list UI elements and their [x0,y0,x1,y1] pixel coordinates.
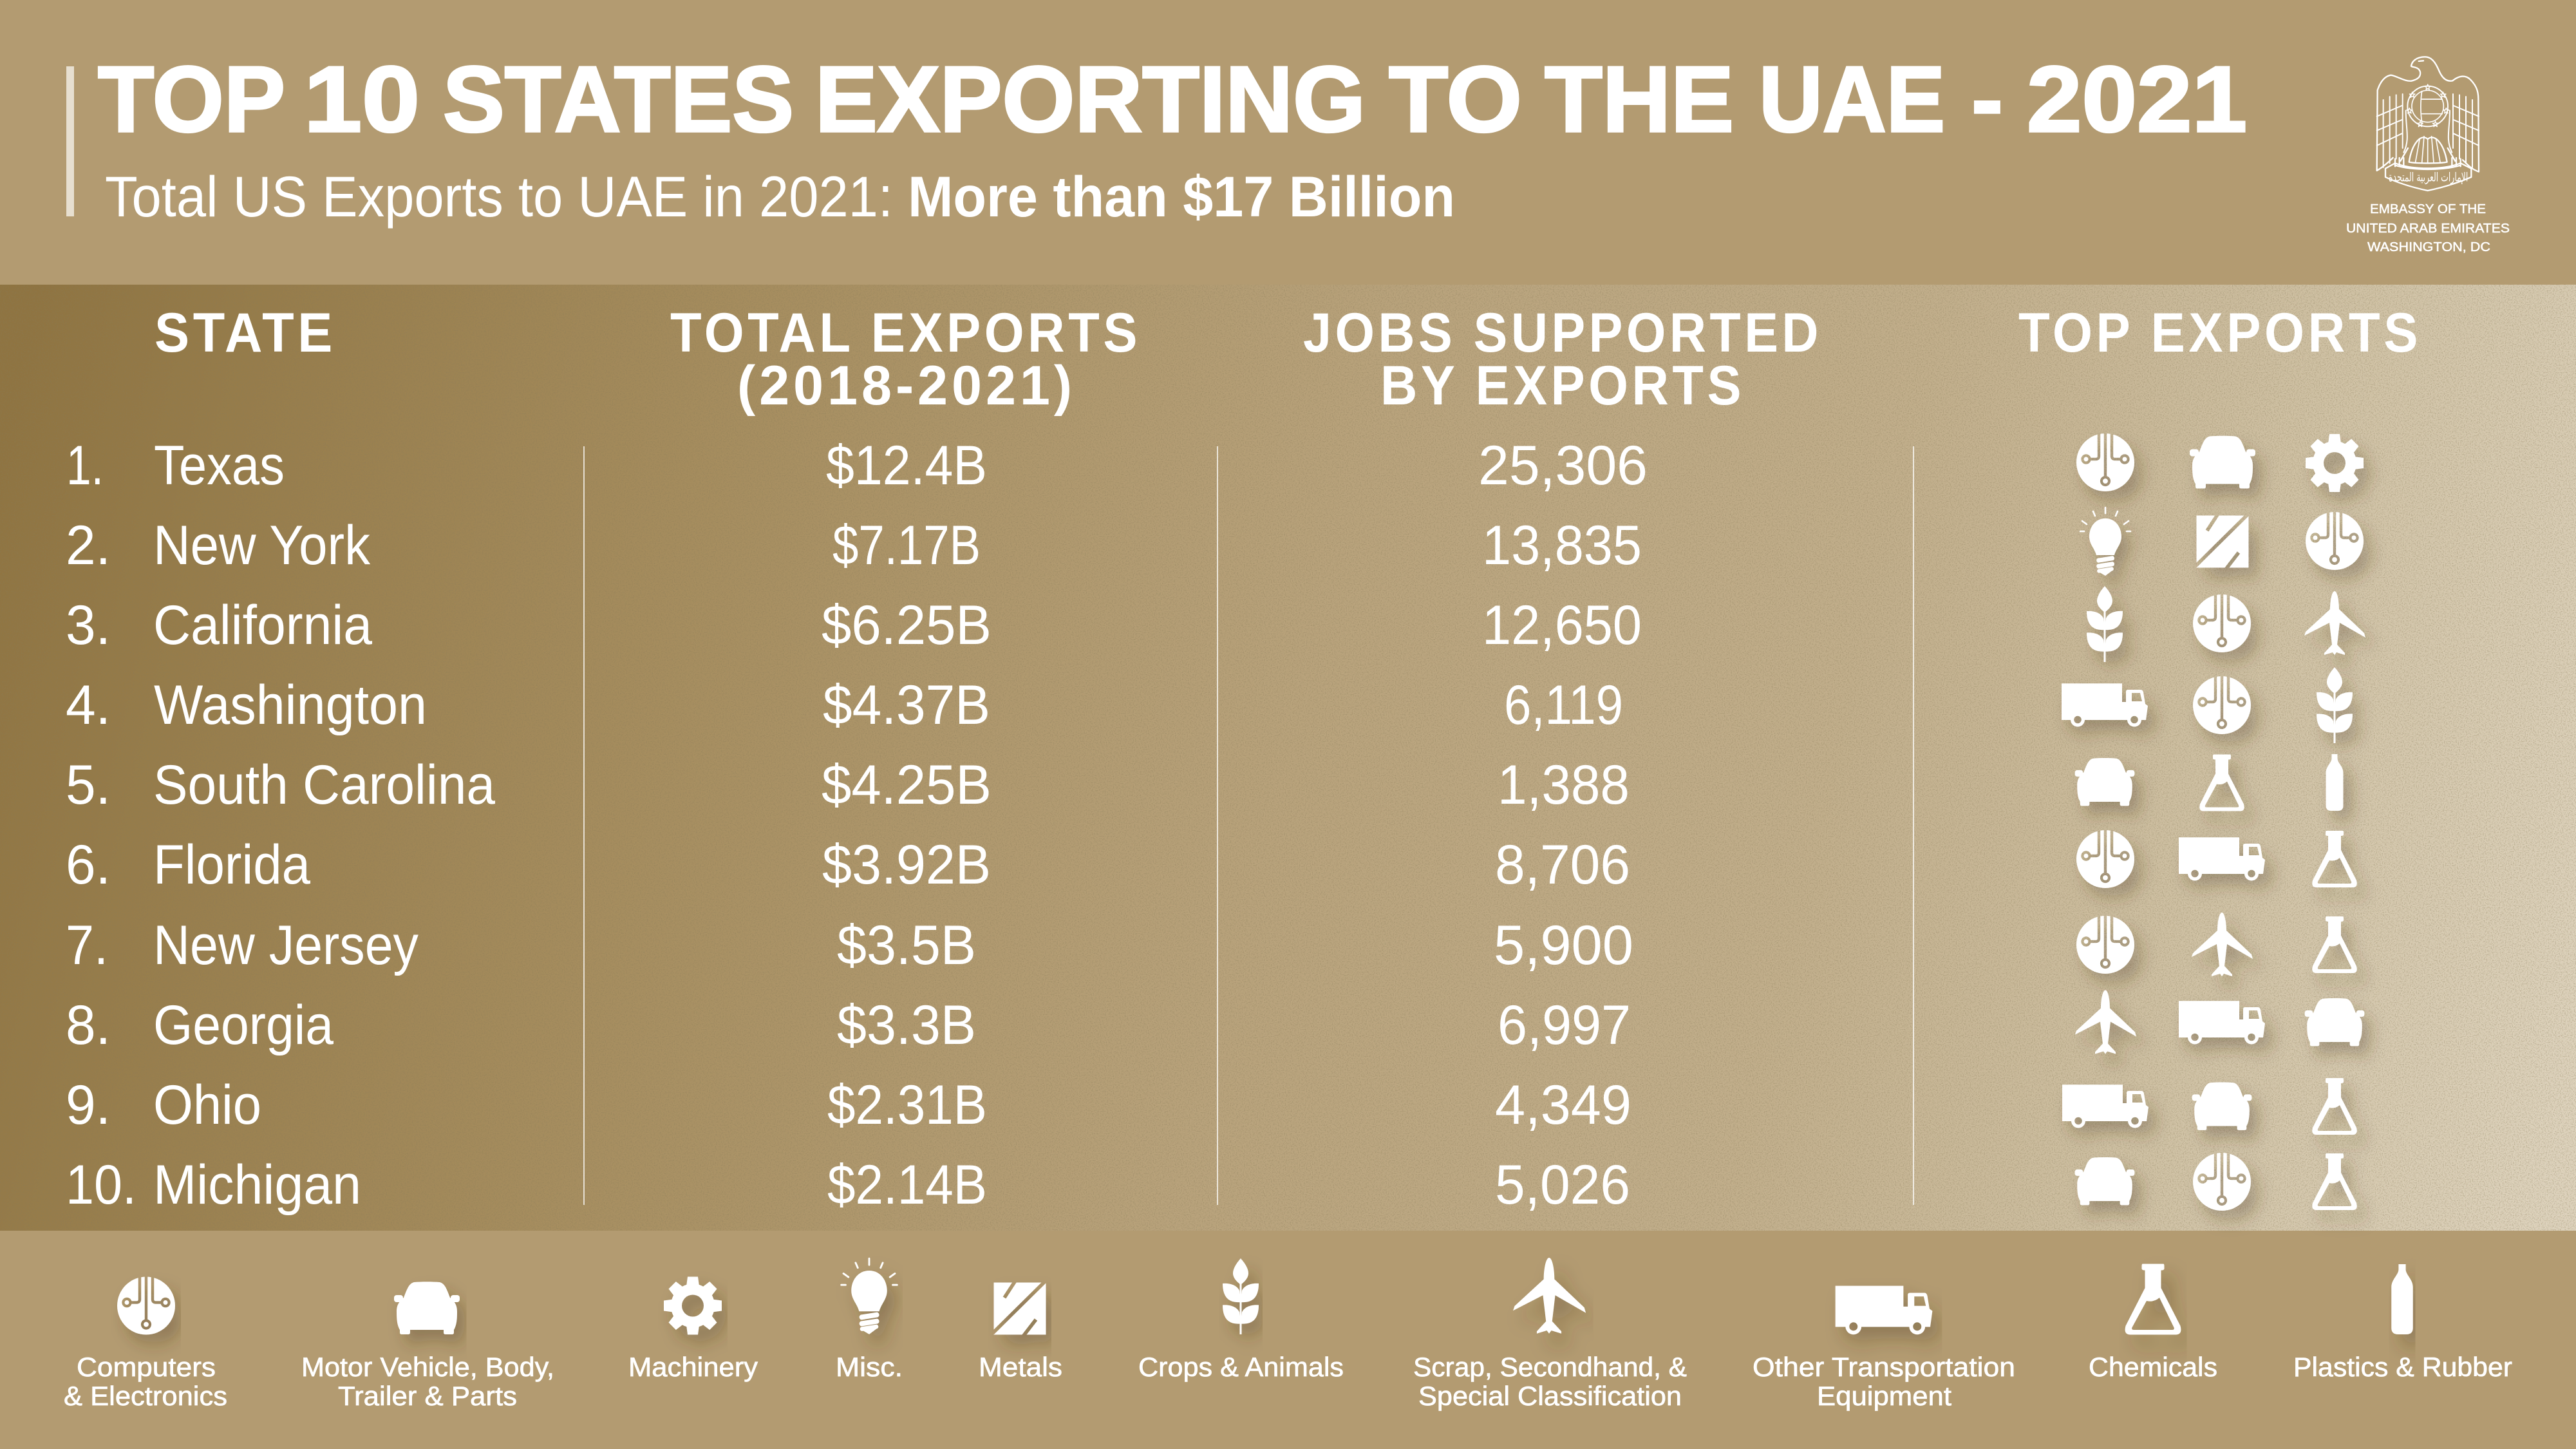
row 7: New Jersey: 7. [66,914,108,976]
row 7: New Jersey: New Jersey [153,914,418,976]
row 3: California: California [153,594,372,656]
icon: computers [2076,830,2134,888]
row 8: Georgia [66,990,2364,1056]
legend item: computers and electronics: Computers [77,1352,216,1382]
legend item: other transportation equipment [1753,1286,2015,1411]
title: 2021 [2027,47,2247,151]
heading: total exports: (2018-2021) [737,355,1076,417]
icon: chemicals [2312,1153,2357,1210]
legend item: other transportation equipment: Equipment [1817,1381,1951,1411]
row 4: Washington: Washington [154,674,427,736]
icon: misc [2080,507,2130,576]
legend item: motor vehicle [301,1282,554,1411]
row 3: California: 12,650 [1482,594,1642,656]
row 9: Ohio: $2.31B [827,1074,987,1136]
legend item: misc: Misc. [836,1352,903,1382]
subtitle: More than $17 Billion [908,164,1455,229]
row 2: New York: 2. [66,515,111,576]
row 8: Georgia: 6,997 [1498,994,1631,1056]
row 8: Georgia: $3.3B [837,994,976,1056]
title [98,47,2247,151]
icon: chemicals [2312,831,2357,887]
title: UAE [1759,47,1945,151]
row 6: Florida: Florida [153,834,310,896]
legend item: scrap, secondhand and special classification: Scrap, Secondhand, & [1413,1352,1687,1382]
row 9: Ohio [66,1074,2357,1136]
icon: computers [2076,916,2134,974]
icon: falcon emblem [2377,57,2479,191]
subtitle: Total US Exports to UAE in 2021: [105,164,893,229]
title: TOP [98,47,285,151]
row 10: Michigan: $2.14B [827,1154,987,1216]
row 7: New Jersey: 5,900 [1494,914,1633,976]
row 6: Florida [66,830,2357,896]
row 10: Michigan [66,1153,2357,1216]
heading: top exports: TOP EXPORTS [2018,302,2421,364]
icon: chemicals [2199,755,2244,811]
row 5: South Carolina: South Carolina [153,754,495,816]
icon: truck [2062,683,2148,726]
row 6: Florida: $3.92B [822,834,991,896]
row 10: Michigan: Michigan [153,1154,361,1216]
row 5: South Carolina: 1,388 [1498,754,1630,816]
row 4: Washington: 6,119 [1504,674,1623,736]
legend item: machinery: Machinery [628,1352,758,1382]
icon: computers [2193,594,2251,652]
icon: metals [2197,515,2248,568]
row 4: Washington [66,667,2353,743]
row 10: Michigan: 10. [66,1154,136,1216]
title: TO [1389,47,1522,151]
title: THE [1545,47,1734,151]
icon: truck [2179,837,2265,881]
icon: plane [2304,591,2365,655]
legend item: computers and electronics: & Electronics [64,1381,227,1411]
row 1: Texas: Texas [154,435,285,497]
row 3: California: 3. [66,594,111,656]
legend item: chemicals: Chemicals [2089,1352,2217,1382]
legend item: motor vehicle: Trailer & Parts [338,1381,517,1411]
row 7: New Jersey [66,913,2357,976]
row 2: New York [66,507,2364,576]
icon: truck [2179,1001,2265,1045]
legend item: metals [979,1283,1062,1382]
legend item: motor vehicle: Motor Vehicle, Body, [301,1352,554,1382]
row 5: South Carolina: $4.25B [822,754,992,816]
embassy name [2346,202,2510,254]
legend item: crops and animals: Crops & Animals [1138,1352,1344,1382]
legend item: machinery [628,1276,758,1382]
column headings [155,302,2421,417]
legend item: other transportation equipment: Other Transportation [1753,1352,2015,1382]
icon: crops [2087,586,2123,662]
heading: total exports [670,302,1141,417]
row 1: Texas [66,433,2364,497]
row 5: South Carolina: 5. [66,754,111,816]
icon: chemicals [2312,1078,2357,1135]
icon: motor vehicle [2075,1157,2134,1205]
row 7: New Jersey: $3.5B [837,914,976,976]
legend item: scrap, secondhand and special classification: Special Classification [1418,1381,1682,1411]
row 4: Washington: $4.37B [823,674,990,736]
row 2: New York: 13,835 [1482,515,1642,576]
row 6: Florida: 8,706 [1495,834,1630,896]
heading: state: STATE [155,302,336,364]
embassy name: EMBASSY OF THE [2370,202,2486,216]
row 3: California: $6.25B [822,594,992,656]
icon: computers [2193,1153,2251,1211]
heading: total exports: TOTAL EXPORTS [670,302,1141,364]
row 8: Georgia: Georgia [153,994,334,1056]
row 2: New York: $7.17B [832,515,981,576]
heading: jobs supported [1303,302,1822,417]
icon: computers [2076,433,2134,491]
title: STATES [443,47,794,151]
row 9: Ohio: 9. [66,1074,111,1136]
icon: computers [2193,676,2251,734]
row 1: Texas: 1. [66,435,104,497]
icon: computers [2306,512,2364,570]
embassy name: UNITED ARAB EMIRATES [2346,222,2510,236]
embassy name: WASHINGTON, DC [2367,240,2490,254]
legend item: misc [836,1258,903,1382]
icon: crops [2317,667,2353,743]
subtitle [105,164,1455,229]
logo: UAE embassy emblem [2346,57,2510,254]
heading: jobs supported: JOBS SUPPORTED [1303,302,1822,364]
row 8: Georgia: 8. [66,994,111,1056]
legend item: computers and electronics [64,1276,227,1411]
legend item: plastics and rubber: Plastics & Rubber [2293,1352,2512,1382]
panel: table background gradient [0,285,2576,1231]
heading: jobs supported: BY EXPORTS [1380,355,1745,417]
row 3: California [66,586,2365,662]
row 4: Washington: 4. [66,674,111,736]
row 1: Texas: 25,306 [1478,435,1648,497]
row 1: Texas: $12.4B [826,435,987,497]
icon: motor vehicle [2190,436,2255,488]
title: EXPORTING [815,47,1366,151]
icon: motor vehicle [2075,758,2134,806]
icon: machinery [2306,434,2364,492]
icon: plane [2192,913,2253,976]
title: - [1971,47,2003,151]
icon: motor vehicle [2192,1083,2252,1130]
legend item: plastics and rubber [2293,1264,2512,1382]
column dividers [584,446,1913,1205]
legend item: crops and animals [1138,1258,1344,1382]
row 5: South Carolina [66,754,2344,816]
row 2: New York: New York [153,515,371,576]
icon: plane [2075,990,2136,1054]
icon: chemicals [2312,916,2357,973]
emblem banner text: الإمارات العربية المتحدة [2389,169,2468,184]
row 9: Ohio: 4,349 [1495,1074,1631,1136]
title: 10 [304,47,420,151]
legend item: metals: Metals [979,1352,1062,1382]
legend item: scrap, secondhand and special classification [1413,1258,1687,1411]
row 6: Florida: 6. [66,834,111,896]
header accent bar [66,66,74,216]
icon: motor vehicle [2305,998,2364,1046]
panel: legend [64,1258,2512,1411]
icon: plastics [2326,754,2344,811]
row 9: Ohio: Ohio [153,1074,261,1136]
row 10: Michigan: 5,026 [1495,1154,1630,1216]
legend item: chemicals [2089,1264,2217,1382]
icon: truck [2062,1084,2148,1128]
